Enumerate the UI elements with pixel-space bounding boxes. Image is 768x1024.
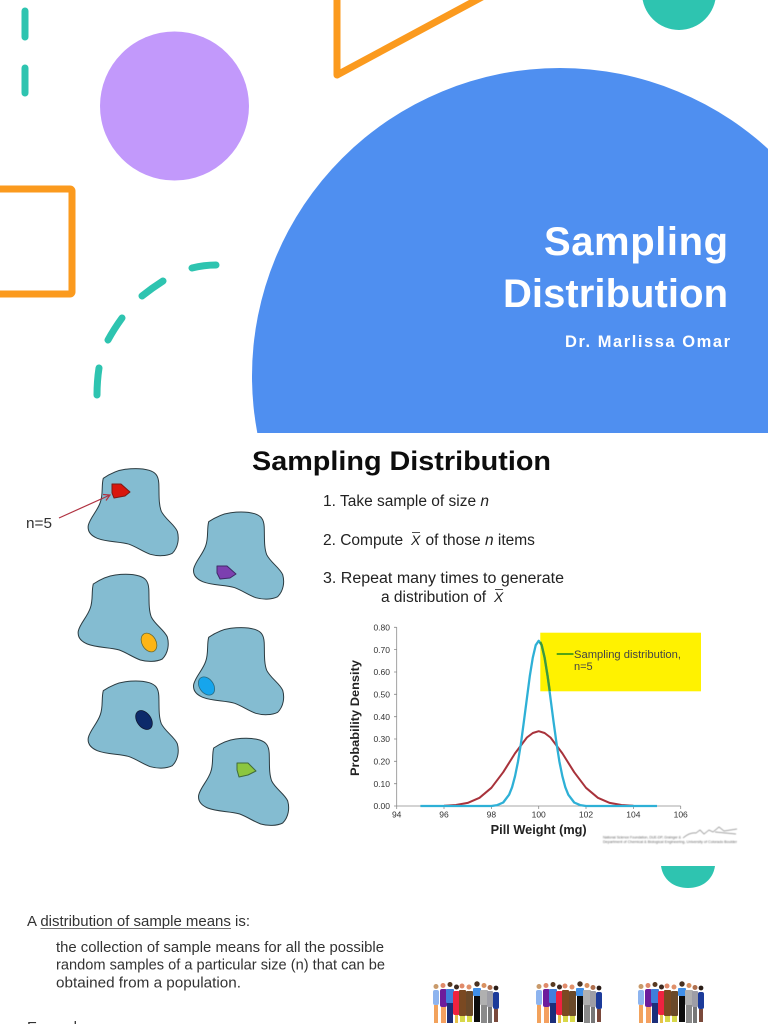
step 2: 2. Compute xyxy=(323,532,403,549)
definition body xyxy=(56,939,385,992)
title: Distribution xyxy=(503,272,728,316)
step 3: 3. Repeat many times to generate xyxy=(323,570,564,587)
x axis ticks labels: 94 xyxy=(392,810,402,820)
step 2: X xyxy=(410,532,421,548)
steps list xyxy=(323,493,564,606)
y axis ticks labels: 0.80 xyxy=(373,622,390,632)
blob 4 with light blue sample xyxy=(194,628,284,715)
blob 2 with purple sample xyxy=(194,512,284,599)
author: Dr. Marlissa Omar xyxy=(565,333,731,351)
step 2: of those n items xyxy=(426,532,535,549)
orange triangle outline xyxy=(337,0,482,75)
curve section over legend box (green) xyxy=(540,642,550,691)
step 3 xyxy=(323,570,564,606)
x axis ticks labels xyxy=(392,810,688,820)
y axis ticks labels: 0.00 xyxy=(373,801,390,811)
step 2 xyxy=(323,532,535,549)
chart: pill weight probability density xyxy=(348,622,738,844)
orange square outline xyxy=(0,189,72,294)
teal dashed arc xyxy=(97,265,216,395)
people group 3 xyxy=(638,981,704,1023)
legend: Sampling distribution, xyxy=(574,649,681,661)
people group 1 xyxy=(433,981,499,1023)
definition body: the collection of sample means for all the possible xyxy=(56,939,384,956)
credits xyxy=(603,827,738,844)
n=5 label: n=5 xyxy=(26,516,52,532)
axes xyxy=(394,627,681,809)
y axis ticks labels xyxy=(373,622,390,811)
icon: people groups xyxy=(433,981,704,1023)
blob 3 with orange sample xyxy=(78,574,168,661)
sampling distribution curve (blue) xyxy=(420,641,657,806)
y axis title: Probability Density xyxy=(348,660,362,776)
credits: Department of Chemical & Biological Engineering, University of Colorado Boulder xyxy=(603,840,738,844)
step 1: 1. Take sample of size n xyxy=(323,493,489,510)
large blue circle xyxy=(252,68,768,433)
legend: n=5 xyxy=(574,661,593,673)
y axis ticks labels: 0.10 xyxy=(373,779,390,789)
x axis ticks labels: 106 xyxy=(674,810,688,820)
x axis ticks labels: 104 xyxy=(626,810,641,820)
y axis ticks labels: 0.50 xyxy=(373,690,390,700)
x axis ticks labels: 102 xyxy=(579,810,593,820)
definition body: obtained from a population. xyxy=(56,974,241,992)
step 3: a distribution of xyxy=(381,589,487,606)
people group 2 xyxy=(536,981,602,1023)
definition lead-in: A distribution of sample means is: xyxy=(27,913,250,930)
definition body: random samples of a particular size (n) that can be xyxy=(56,956,385,974)
panel: definition slide xyxy=(27,866,715,1024)
panel: title slide xyxy=(0,0,768,433)
x axis title: Pill Weight (mg) xyxy=(491,823,587,837)
step 3: X xyxy=(493,589,504,605)
x axis ticks labels: 98 xyxy=(487,810,496,820)
y axis ticks labels: 0.60 xyxy=(373,667,390,677)
heading: Sampling Distribution xyxy=(252,446,551,476)
title xyxy=(506,226,726,308)
blob 5 with navy sample xyxy=(88,681,178,768)
y axis ticks labels: 0.40 xyxy=(373,712,390,722)
arrow to red sample xyxy=(59,494,110,518)
population curve (red) xyxy=(444,731,633,806)
y axis ticks labels: 0.70 xyxy=(373,645,390,655)
teal half circle xyxy=(661,866,715,888)
title: Sampling xyxy=(544,220,728,264)
y axis ticks labels: 0.30 xyxy=(373,734,390,744)
purple circle xyxy=(100,32,249,180)
population blobs with samples xyxy=(78,469,289,825)
legend box xyxy=(540,633,701,691)
panel: sampling distribution slide xyxy=(26,446,738,844)
legend xyxy=(557,649,681,673)
x axis ticks labels: 96 xyxy=(439,810,449,820)
teal dashed vertical line xyxy=(22,11,28,93)
blob 6 with green sample xyxy=(199,738,289,825)
teal circle top right xyxy=(642,0,716,30)
blob 1 with red sample xyxy=(88,469,178,556)
credits: National Science Foundation, DUE-DP, Grainger & xyxy=(603,836,681,840)
y axis ticks labels: 0.20 xyxy=(373,756,390,766)
x axis ticks labels: 100 xyxy=(532,810,546,820)
